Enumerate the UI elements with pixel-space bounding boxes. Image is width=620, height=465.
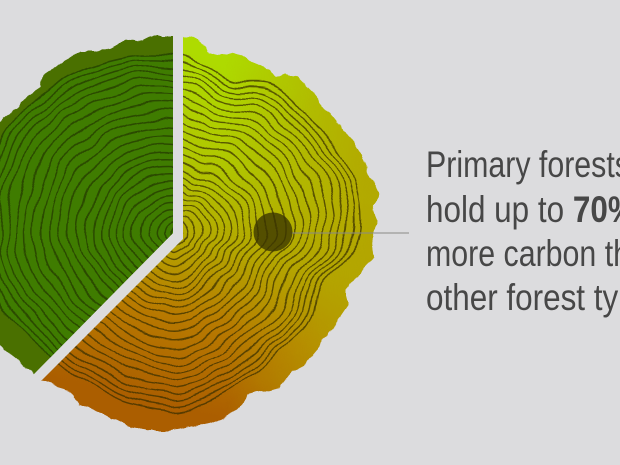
green sector tree rings	[0, 52, 173, 358]
callout leader line	[290, 232, 409, 234]
panel: primary forest green sector	[0, 35, 173, 374]
gradient wood fill	[28, 38, 378, 430]
panel: other forest gradient sector	[0, 38, 378, 430]
text block: primary forests statement	[426, 144, 620, 319]
gradient sector tree rings	[58, 53, 362, 415]
green sector outer bark	[0, 36, 182, 376]
olive tint toward right edge	[246, 60, 380, 396]
callout marker circle	[254, 212, 292, 252]
green sector inner wood	[0, 54, 173, 357]
